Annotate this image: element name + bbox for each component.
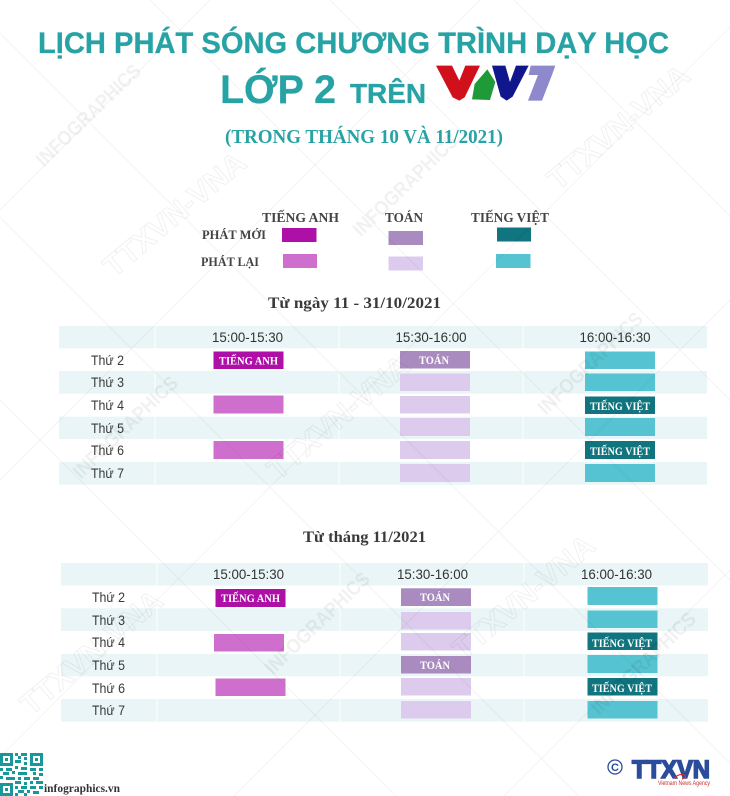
watermark: agency marks: TTXVN-VNA xyxy=(14,584,170,722)
panel: schedule table 1: Thứ 7 xyxy=(91,465,124,481)
watermark: agency marks: TTXVN-VNA xyxy=(446,529,602,667)
watermark: agency marks: TTXVN-VNA xyxy=(541,59,697,197)
watermark: agency marks: TTXVN-VNA xyxy=(97,146,253,284)
heading: schedule 2: Từ tháng 11/2021 xyxy=(303,529,426,546)
icon: copyright: C xyxy=(611,762,619,774)
panel: schedule table 2: TIẾNG ANH xyxy=(221,590,280,605)
panel: schedule table 2: TIẾNG VIỆT xyxy=(592,635,652,650)
panel: schedule table 1: TIẾNG ANH xyxy=(219,352,278,368)
icon: QR code xyxy=(0,753,43,796)
panel: schedule table 2: 15:30-16:00 xyxy=(397,566,468,582)
panel: schedule table 1: Thứ 2 xyxy=(91,352,124,368)
legend xyxy=(201,210,549,270)
watermark: agency marks: INFOGRAPHICS xyxy=(69,372,183,483)
legend: TOÁN xyxy=(385,210,423,225)
panel: schedule table 1: 15:30-16:00 xyxy=(396,329,467,345)
panel: schedule table 2: Thứ 5 xyxy=(92,657,125,673)
panel: schedule table 1: 15:00-15:30 xyxy=(212,329,283,345)
panel: schedule table 2 xyxy=(61,563,708,722)
panel: schedule table 1: Thứ 3 xyxy=(91,374,124,390)
panel: schedule table 1: TOÁN xyxy=(419,353,450,367)
title: TRÊN xyxy=(350,78,426,109)
panel: schedule table 1: Thứ 6 xyxy=(91,442,124,458)
watermark: agency marks: INFOGRAPHICS xyxy=(534,308,648,419)
panel: schedule table 2: Thứ 3 xyxy=(92,612,125,628)
panel: schedule table 2: TIẾNG VIỆT xyxy=(592,680,652,695)
legend: TIẾNG VIỆT xyxy=(471,210,549,225)
panel: schedule table 2: Thứ 7 xyxy=(92,702,125,718)
panel: schedule table 2: Thứ 4 xyxy=(92,634,125,650)
watermark: agency marks: INFOGRAPHICS xyxy=(261,568,375,679)
panel: schedule table 1: Thứ 5 xyxy=(91,420,124,436)
icon: VTV7 logo xyxy=(436,66,555,101)
icon: copyright xyxy=(608,760,622,774)
title: LỊCH PHÁT SÓNG CHƯƠNG TRÌNH DẠY HỌC xyxy=(38,26,669,60)
watermark: agency marks: INFOGRAPHICS xyxy=(32,60,146,171)
panel: schedule table 1: TIẾNG VIỆT xyxy=(590,398,650,413)
panel: schedule table 2: TOÁN xyxy=(420,658,451,672)
panel: schedule table 1: TIẾNG VIỆT xyxy=(590,443,650,458)
panel: schedule table 2: 15:00-15:30 xyxy=(213,566,284,582)
panel: schedule table 2: 16:00-16:30 xyxy=(581,566,652,582)
watermark: agency marks: INFOGRAPHICS xyxy=(587,608,701,719)
logo: TTXVN: TTXVN xyxy=(632,756,710,784)
subtitle: (TRONG THÁNG 10 VÀ 11/2021) xyxy=(225,125,503,148)
watermark: agency marks: INFOGRAPHICS xyxy=(349,130,463,241)
panel: schedule table 2: TOÁN xyxy=(420,590,451,604)
panel: schedule table 2: Thứ 6 xyxy=(92,680,125,696)
logo: TTXVN: Vietnam News Agency xyxy=(658,781,710,787)
watermark: agency marks: TTXVN-VNA xyxy=(261,349,417,487)
legend: PHÁT MỚI xyxy=(202,228,266,242)
credit: website: infographics.vn xyxy=(44,783,121,795)
title: LỚP 2 xyxy=(220,66,336,112)
watermark: agency marks xyxy=(14,59,701,722)
legend: PHÁT LẠI xyxy=(201,255,259,269)
panel: schedule table 1: 16:00-16:30 xyxy=(580,329,651,345)
panel: schedule table 2: Thứ 2 xyxy=(92,589,125,605)
panel: schedule table 1: Thứ 4 xyxy=(91,397,124,413)
title xyxy=(38,26,669,112)
panel: schedule table 1 xyxy=(59,326,707,485)
legend: TIẾNG ANH xyxy=(262,210,339,225)
heading: schedule 1: Từ ngày 11 - 31/10/2021 xyxy=(268,295,441,312)
